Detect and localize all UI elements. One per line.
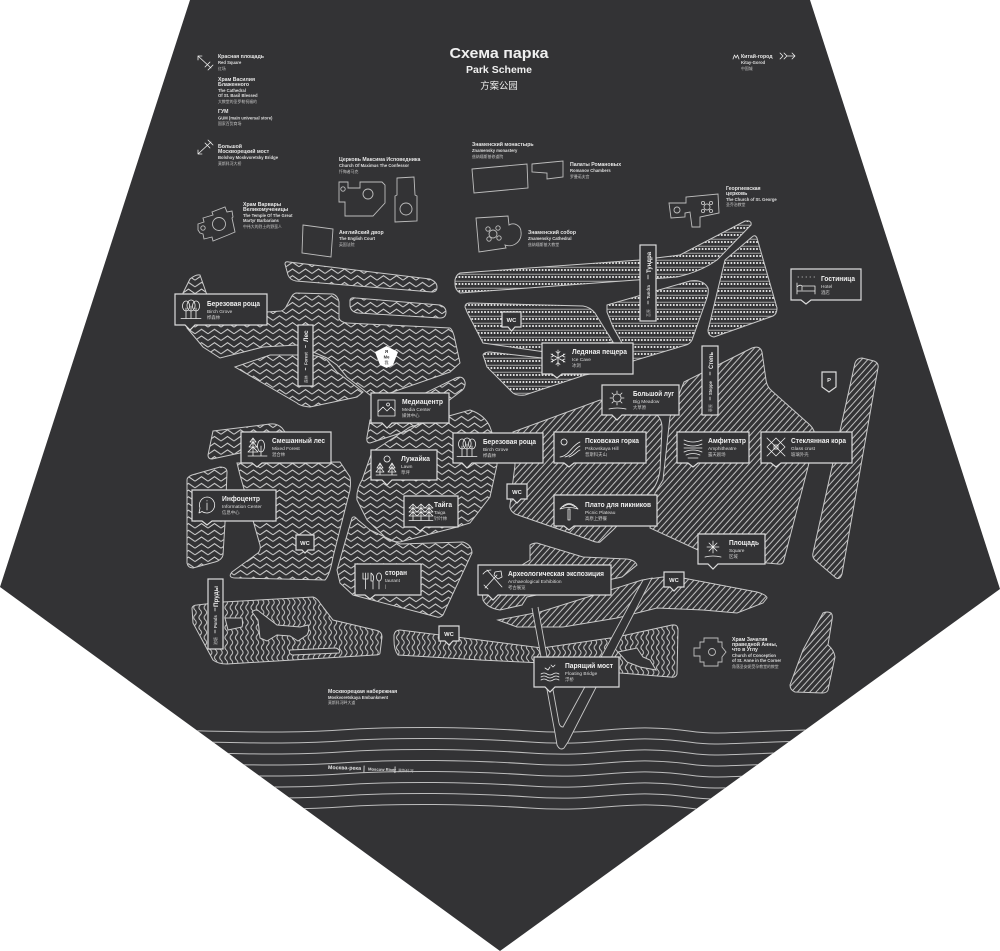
icon: sun over firs [376, 456, 397, 475]
label: Picnic Plateau: Плато для пикников [585, 500, 651, 509]
label: Moscow River: Moscow River [368, 767, 397, 772]
label: Big Meadow: Big Meadow [633, 399, 660, 405]
icon: star burst square [705, 541, 721, 557]
label: Hotel: Гостиница [821, 274, 856, 283]
direction: Kitay-Gorod metro: Kitay-Gorod [741, 60, 766, 65]
label: Lawn: Lawn [401, 464, 413, 470]
label: Media Center [371, 393, 449, 428]
marker: WC embankment: WC [444, 632, 455, 638]
label: Big Meadow [602, 385, 679, 420]
icon: taiga firs [409, 504, 433, 520]
label: Taiga [404, 496, 458, 531]
building: Church of Conception of St. Anne: Church of Conception [732, 653, 776, 658]
label: Moscow River: 莫斯科河 [398, 768, 414, 773]
direction: Red Square group: GUM (main universal store) [218, 116, 273, 120]
label: Pskov Hill: Pskovskaya Hill [585, 446, 619, 452]
icon: birds over waves [541, 665, 559, 681]
forest zone: mixed forest main [230, 462, 350, 580]
forest zone: top strip [285, 262, 437, 292]
label: Amphitheatre [677, 432, 749, 467]
label: Lawn [371, 450, 437, 485]
direction: Red Square group: ГУМ [218, 109, 228, 115]
label: Restaurant: taurant [385, 578, 401, 584]
marker: WC forest: WC [300, 541, 311, 547]
direction: Red Square group: Of St. Basil Blessed [218, 93, 258, 98]
icon: picnic table [560, 504, 578, 520]
heading [450, 45, 549, 91]
label: Mixed Forest: Mixed Forest [272, 446, 300, 452]
ponds zone: right with bay [394, 625, 678, 677]
forest zone: lawn and taiga [357, 410, 497, 542]
label: Ice Cave: Ice Cave [572, 357, 591, 363]
building: Znamensky Monastery [472, 141, 534, 193]
direction: Bolshoy Moskvoretsky Bridge [198, 140, 279, 166]
label: Archaeological Exhibition [478, 565, 611, 600]
building: Church of Maximus [339, 157, 421, 222]
label: Floating Bridge [534, 657, 619, 692]
forest zone: information center piece [187, 467, 227, 568]
steppe zone: long strip [498, 577, 767, 627]
label: Moskvoretskaya Embankment: Москворецкая набережная [328, 688, 397, 695]
building: Church of St. George: церковь [726, 191, 747, 197]
label: Steppe vertical [702, 346, 718, 415]
building: English Court: 英国法院 [339, 242, 355, 247]
building: Church of Maximus: Church Of Maximus The Confessor [339, 163, 409, 168]
label: Steppe vertical: 草原 [708, 404, 713, 412]
direction: Kitay-Gorod metro [733, 53, 795, 71]
building: Church of St. George [669, 186, 777, 227]
marker: Я Me [375, 346, 398, 368]
icon: trees [181, 300, 201, 318]
marker: WC north: WC [507, 318, 517, 324]
label: Birch Grove 2: Березовая роща [483, 437, 537, 446]
building: Znamensky Cathedral: Знаменский собор [528, 229, 576, 236]
direction: Bolshoy Moskvoretsky Bridge: Москворецкий мост [218, 148, 270, 155]
icon: picture [378, 400, 395, 416]
icon: fir and oak [248, 438, 267, 456]
direction: Red Square group: 红场 [218, 66, 226, 71]
forest zone: upper forest [183, 275, 460, 395]
building: Church of Conception of St. Anne: 角落圣安妮受孕教堂的教堂 [732, 664, 779, 669]
forest zone: mixed forest top piece [208, 424, 285, 459]
forest zone: restaurant piece [337, 517, 472, 617]
label: Square: Площадь [729, 538, 759, 547]
label: Restaurant: | [385, 584, 386, 589]
label: Information Center: Инфоцентр [222, 494, 260, 503]
label: Glass Crust: Стеклянная кора [791, 436, 847, 445]
icon: information bubble [199, 497, 215, 513]
building: Church of Conception of St. Anne: что в Углу [732, 647, 758, 653]
marker: WC embankment [439, 626, 459, 645]
marker: WC south-east: WC [669, 578, 680, 584]
building: Church of St. George: The Church of St. George [726, 197, 777, 202]
label: Media Center: Медиацентр [402, 397, 443, 406]
building: Church of Conception of St. Anne [694, 637, 782, 669]
forest zone: lower forest piece [235, 355, 363, 407]
label: Birch Grove 2: 桦森林 [483, 452, 497, 459]
label: Restaurant [355, 564, 421, 599]
icon: sun and hill [560, 439, 580, 457]
building: Temple of St. Barbara: Martyr Barbarians [243, 218, 280, 223]
building: Romanov Chambers: 罗曼诺夫宫 [570, 174, 590, 179]
forest zone: middle strip [350, 298, 446, 318]
tundra zone: right triangle [708, 236, 777, 337]
marker: Я Me: Me [384, 354, 390, 360]
label: Glass Crust [761, 432, 852, 467]
label: Pskov Hill: 普斯科夫山 [585, 451, 607, 458]
label: Media Center: Media Center [402, 407, 431, 413]
label: Hotel: 酒店 [821, 289, 830, 296]
steppe zone: archaeology piece [482, 543, 637, 610]
label: Archaeological Exhibition: 考古展览 [508, 584, 526, 591]
building: Temple of St. Barbara: Храм Варвары [243, 202, 282, 208]
direction: Red Square group: The Cathedral [218, 88, 246, 93]
icon: amphitheatre [684, 440, 702, 458]
label: Information Center: Information Center [222, 504, 262, 510]
label: Floating Bridge: 浮桥 [565, 676, 574, 683]
label: Big Meadow: 大草原 [633, 404, 647, 411]
label: Taiga: 针叶林 [434, 515, 448, 522]
label: Taiga: Тайга [434, 500, 453, 509]
direction: Red Square group: 国家百货商场 [218, 121, 241, 126]
label: Moskvoretskaya Embankment: 莫斯科河畔大道 [328, 700, 355, 705]
label: Mixed Forest [241, 432, 331, 467]
label: Forest vertical [298, 325, 313, 386]
tundra zone: middle [607, 281, 708, 361]
building: English Court: The English Court [339, 236, 376, 241]
tundra zone: strip [455, 221, 751, 293]
label: Birch Grove 1: Birch Grove [207, 309, 233, 315]
icon: shovel and pick [483, 570, 502, 589]
label: Media Center: 媒体中心 [402, 412, 420, 419]
building: Temple of St. Barbara: Великомученицы [243, 207, 289, 213]
tundra zone: left lower [483, 352, 600, 395]
label: Floating Bridge: Парящий мост [565, 661, 613, 670]
steppe zone: big field [650, 347, 815, 564]
direction: Kitay-Gorod metro: 中国城 [741, 66, 753, 71]
forest zone: media center piece [367, 377, 465, 443]
direction: Red Square group: Блаженного [218, 82, 249, 88]
direction: Red Square group: 大教堂的圣罗勒祝福的 [218, 99, 257, 104]
label: Moscow River [328, 765, 414, 773]
building: Temple of St. Barbara [198, 202, 293, 241]
direction: Red Square group: Красная площадь [218, 54, 264, 60]
label: Archaeological Exhibition: Archaeological Exhibition [508, 579, 562, 585]
building: Church of St. George: 圣乔治教堂 [726, 202, 746, 207]
building: Znamensky Monastery: Znamensky monastery [472, 148, 518, 153]
direction: Red Square group: Red Square [218, 60, 242, 65]
marker: WC north [502, 312, 521, 331]
building: Church of Conception of St. Anne: Храм Зачатия [732, 637, 767, 643]
label: Ponds vertical [208, 579, 223, 649]
heading: Схема парка [450, 45, 549, 62]
label: Mixed Forest: 混合林 [272, 451, 286, 458]
tundra zone: left upper [465, 303, 613, 352]
icon: hotel bed [797, 277, 815, 294]
marker: WC south-east [664, 572, 684, 591]
building: English Court [302, 225, 384, 257]
label: Square [698, 534, 765, 569]
label: Mixed Forest: Смешанный лес [272, 436, 325, 445]
heading: Park Scheme [466, 64, 532, 76]
label: Ice Cave: 冰洞 [572, 362, 581, 368]
label: Ponds vertical: 池塘 [213, 637, 218, 645]
building: Church of Conception of St. Anne: of St. Anne in the Corner [732, 658, 782, 663]
label: Amphitheatre: 露天剧场 [708, 451, 726, 458]
building: English Court: Английский двор [339, 229, 384, 236]
marker: parking [822, 372, 836, 392]
label: Archaeological Exhibition: Археологическая экспозиция [508, 569, 604, 578]
building: Romanov Chambers: Romanov Chambers [570, 168, 611, 173]
label: Glass Crust: Glass crust [791, 446, 816, 452]
label: Tundra vertical [640, 245, 656, 321]
label: Steppe vertical: Steppe [708, 380, 713, 395]
label: Information Center [192, 490, 276, 525]
label: Moscow River: Москва-река [328, 765, 361, 772]
icon: cutlery [363, 573, 382, 589]
steppe zone: Pskov hill and picnic plateau [510, 400, 662, 542]
label: Moskvoretskaya Embankment [328, 688, 397, 705]
direction: Bolshoy Moskvoretsky Bridge: Bolshoy Moskvoretsky Bridge [218, 155, 279, 160]
direction: Red Square group: Храм Василия [218, 77, 255, 83]
label: Forest vertical: Forest [304, 352, 308, 365]
label: Ponds vertical: Пруды [213, 585, 220, 607]
building: Church of Conception of St. Anne: праведной Анны, [732, 641, 778, 648]
building: Church of St. George: Георгиевская [726, 186, 761, 192]
label: Picnic Plateau: Picnic Plateau [585, 510, 616, 516]
label: Ponds vertical: Ponds [213, 615, 218, 628]
building: Romanov Chambers [532, 161, 621, 179]
label: Taiga: Taiga [434, 510, 446, 516]
direction: Red Square group [198, 54, 273, 126]
building: Temple of St. Barbara: The Temple Of The Great [243, 213, 293, 218]
label: Big Meadow: Большой луг [633, 389, 674, 398]
icon: trees [457, 438, 477, 456]
icon: sun over meadow [609, 391, 626, 409]
icon: glass crystal [767, 438, 785, 456]
marker: Я Me: 我 [384, 359, 388, 365]
label: Ice Cave: Ледяная пещера [572, 347, 628, 356]
label: Glass Crust: 玻璃外壳 [791, 451, 809, 458]
label: Tundra vertical: Тундра [646, 252, 653, 273]
label: Birch Grove 2: Birch Grove [483, 447, 509, 453]
building: Znamensky Cathedral: Znamensky Cathedral [528, 236, 572, 241]
heading: 方案公园 [480, 80, 518, 91]
label: Pskov Hill [554, 432, 646, 467]
label: Information Center: 信息中心 [222, 509, 240, 516]
label: Ice Cave [542, 343, 633, 378]
building: Temple of St. Barbara: 中伟大的烈士的野蛮人 [243, 224, 282, 229]
marker: WC forest [296, 535, 314, 553]
floating bridge road [532, 578, 652, 749]
label: Birch Grove 1: 桦森林 [207, 314, 221, 321]
label: Pskov Hill: Псковская горка [585, 436, 640, 445]
marker: WC centre [507, 484, 527, 503]
marker: Я Me: Я [385, 349, 388, 354]
label: Birch Grove 1 [175, 294, 267, 330]
marker: parking: P [827, 378, 831, 384]
label: Tundra vertical: 苔原 [646, 309, 651, 317]
label: Steppe vertical: Степь [708, 352, 715, 369]
label: Square: Square [729, 548, 745, 554]
building: Znamensky Cathedral [476, 216, 576, 252]
building: Church of Maximus: Церковь Максима Исповедника [339, 157, 421, 163]
label: Birch Grove 2 [453, 433, 543, 468]
label: Hotel: Hotel [821, 284, 832, 290]
label: Lawn: 草坪 [401, 469, 410, 476]
label: Birch Grove 1: Березовая роща [207, 299, 261, 308]
building: Znamensky Monastery: 兹纳缅斯基修道院 [472, 154, 503, 159]
direction: Bolshoy Moskvoretsky Bridge: 莫斯科河大桥 [218, 161, 241, 166]
label: Square: 区域 [729, 553, 738, 559]
label: Lawn: Лужайка [401, 454, 431, 463]
icon: snowflake [551, 350, 565, 366]
building: Church of Maximus: 忏悔者马克 [339, 169, 359, 174]
label: Forest vertical: 森林 [304, 375, 308, 383]
steppe zone: bottom right strip [790, 612, 835, 693]
label: Floating Bridge: Floating Bridge [565, 671, 598, 677]
label: Tundra vertical: Tundra [646, 284, 651, 299]
direction: Bolshoy Moskvoretsky Bridge: Большой [218, 143, 242, 150]
river lines [197, 727, 806, 810]
steppe zone: right strip [813, 358, 878, 578]
label: Picnic Plateau [554, 495, 657, 530]
building: Znamensky Cathedral: 兹纳缅斯基大教堂 [528, 242, 559, 247]
label: Amphitheatre: Amphitheatre [708, 446, 737, 452]
marker: WC centre: WC [512, 490, 523, 496]
label: Forest vertical: Лес [303, 330, 310, 342]
direction: Kitay-Gorod metro: Китай-город [741, 53, 773, 60]
building: Romanov Chambers: Палаты Романовых [570, 162, 621, 168]
label: Hotel [791, 269, 861, 304]
ponds zone: left with lakes [192, 597, 382, 664]
label: Picnic Plateau: 高原上野餐 [585, 515, 608, 522]
label: Restaurant: сторан [385, 568, 407, 577]
building: Znamensky Monastery: Знаменский монастырь [472, 141, 534, 148]
label: Moskvoretskaya Embankment: Moskvoretskaya Embankment [328, 695, 389, 700]
label: Amphitheatre: Амфитеатр [708, 436, 746, 445]
